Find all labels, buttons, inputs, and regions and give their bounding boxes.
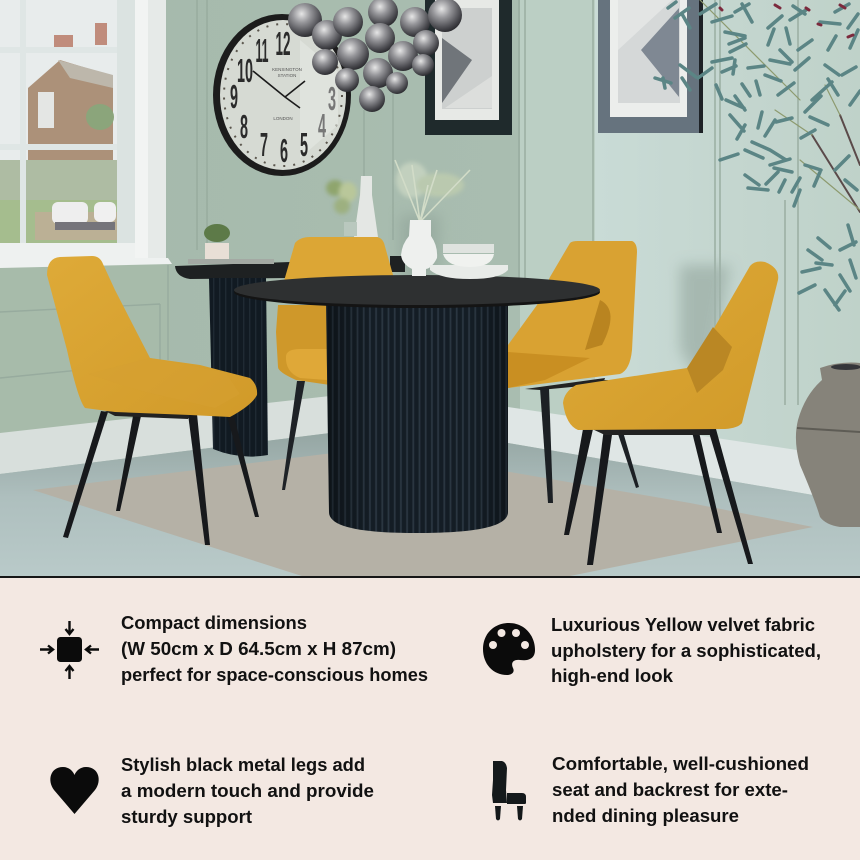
clock numerals: 9 [230,78,238,115]
text: velvet upholstery: high-end look [551,665,674,686]
icon: dining chair [492,761,526,820]
clock numerals: 10 [237,52,253,89]
vase with dried stems [395,160,470,276]
text: metal legs [121,754,374,827]
skirting boards [0,396,813,495]
wall clock: 3 [328,80,336,117]
clock numerals: KENSINGTON [272,67,302,72]
wall [0,0,860,577]
stone urn [796,363,860,527]
photo: dining room scene [0,0,860,578]
text: velvet upholstery [551,614,821,686]
clock numerals: STATION [278,73,296,78]
clock numerals: 7 [260,126,268,163]
clock numerals [230,25,336,169]
console decor [188,176,378,264]
text: cushioned comfort: seat and backrest for exte- [552,779,788,800]
text: metal legs: Stylish black metal legs add [121,754,365,775]
text: cushioned comfort: nded dining pleasure [552,805,739,826]
right picture frame [598,0,703,133]
feature: compact dimensions [40,612,428,685]
feature: metal legs [50,754,374,827]
text: velvet upholstery: Luxurious Yellow velvet fabric [551,614,815,635]
chair: back right [508,241,639,503]
text: compact dimensions: perfect for space-conscious homes [121,664,428,685]
panel: feature list background [0,578,860,860]
clock numerals: 11 [256,32,268,69]
clock numerals: 4 [318,107,326,144]
icon: painter's palette [483,623,535,675]
icon: heart [50,767,99,814]
chair: back left [276,237,393,490]
icon: compress arrows around a square [40,621,99,679]
clock numerals: 6 [280,132,288,169]
dining table top [234,275,600,308]
left picture frame [425,0,512,135]
text: metal legs: sturdy support [121,806,252,827]
floor [0,433,860,577]
text: cushioned comfort: Comfortable, well-cushioned [552,753,809,774]
chair: front right [563,262,778,565]
feature: velvet upholstery [483,614,821,686]
text: compact dimensions [121,612,428,685]
stacked plates and bowls [430,244,508,279]
text: cushioned comfort [552,753,809,826]
clock numerals: 5 [300,126,308,163]
text: compact dimensions: (W 50cm x D 64.5cm x H 87cm) [121,638,396,659]
chair: front left [47,256,259,545]
feature: cushioned comfort [492,753,809,826]
text: metal legs: a modern touch and provide [121,780,374,801]
olive tree branches [655,0,860,310]
console table [175,256,405,457]
clock numerals: LONDON [273,116,293,121]
clock numerals: 12 [276,25,290,62]
window with garden view [0,0,172,268]
dining table base [326,300,508,533]
wall clock [213,14,351,176]
clock numerals: 8 [240,108,248,145]
image bottom border [0,576,860,578]
text: velvet upholstery: upholstery for a sophisticated, [551,640,821,661]
text: compact dimensions: Compact dimensions [121,612,307,633]
clock hands [253,71,305,108]
rug [33,453,813,577]
chandelier of silver globes [288,0,462,112]
